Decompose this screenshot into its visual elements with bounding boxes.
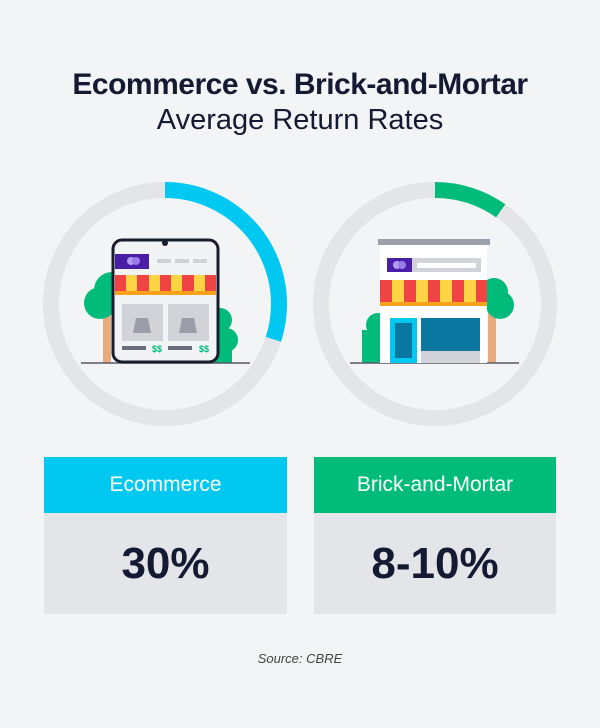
value: 8-10% [314,513,556,614]
title: Average Return Rates [157,104,443,136]
header: ecommerce: Ecommerce [109,473,222,496]
value: 30% [44,513,287,614]
ring: brick [321,190,549,418]
value: 30%: 30% [121,539,210,588]
illustrations [43,182,557,426]
header: brick [314,457,556,513]
ring: ecommerce [51,190,279,418]
icon: phone storefront: $$ [199,344,209,354]
source: Source: CBRE [258,651,342,666]
panel: ecommerce [44,457,287,614]
icon: phone storefront: $$ [152,344,162,354]
panel: brick-and-mortar [314,457,556,614]
icon: brick store [350,239,519,363]
title: Ecommerce vs. Brick-and-Mortar [72,68,528,101]
icon: phone storefront [81,240,250,363]
value: 8-10%: 8-10% [371,539,499,588]
title [72,68,528,136]
header: brick: Brick-and-Mortar [357,473,513,496]
header: ecommerce [44,457,287,513]
